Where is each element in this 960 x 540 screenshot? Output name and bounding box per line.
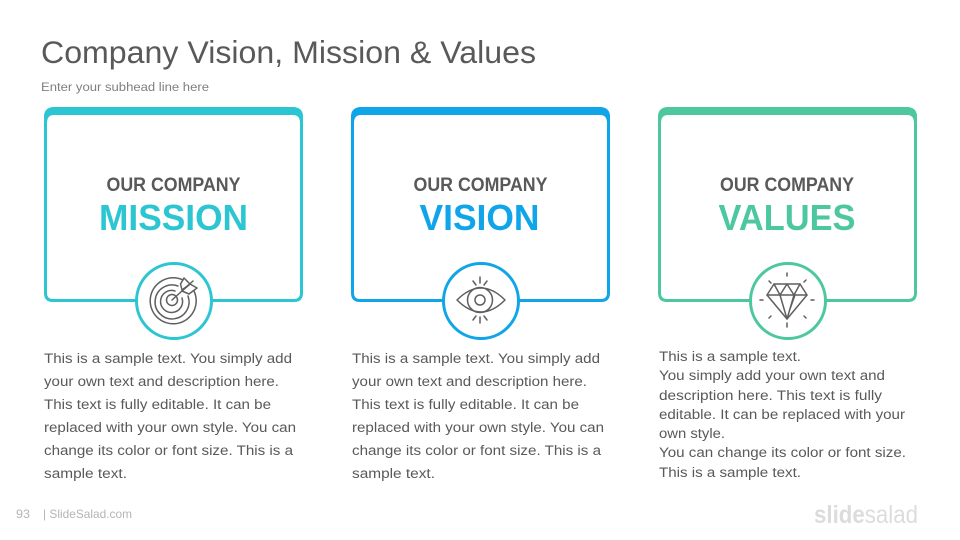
vision description: replaced with your own style. You can bbox=[352, 420, 604, 436]
values description: editable. It can be replaced with your bbox=[659, 407, 905, 423]
footer page number and site: | SlideSalad.com bbox=[43, 507, 132, 521]
values description: This is a sample text. bbox=[659, 349, 801, 365]
vision description: sample text. bbox=[352, 466, 435, 482]
vision description: This is a sample text. You simply add bbox=[352, 351, 600, 367]
icon: target with arrow bbox=[136, 264, 212, 338]
subhead: Enter your subhead line here bbox=[41, 80, 209, 94]
mission description: sample text. bbox=[44, 466, 127, 482]
mission description: replaced with your own style. You can bbox=[44, 420, 296, 436]
brand logo: slidesalad bbox=[814, 501, 918, 529]
values description: You simply add your own text and bbox=[659, 368, 885, 384]
values card frame bbox=[658, 107, 917, 300]
values heading bbox=[718, 174, 856, 238]
vision heading: VISION bbox=[420, 197, 540, 238]
mission heading bbox=[99, 174, 248, 238]
panel: vision bbox=[351, 107, 610, 482]
mission card frame bbox=[44, 107, 303, 300]
mission description: This text is fully editable. It can be bbox=[44, 397, 271, 413]
vision description: change its color or font size. This is a bbox=[352, 443, 601, 459]
panel: values bbox=[658, 107, 917, 481]
vision description: your own text and description here. bbox=[352, 374, 587, 390]
vision description bbox=[352, 351, 604, 482]
panel: mission bbox=[44, 107, 303, 482]
footer page number and site: 93 bbox=[16, 507, 30, 521]
values description bbox=[659, 349, 906, 481]
vision description: This text is fully editable. It can be bbox=[352, 397, 579, 413]
values description: description here. This text is fully bbox=[659, 388, 883, 404]
mission description: This is a sample text. You simply add bbox=[44, 351, 292, 367]
mission description: your own text and description here. bbox=[44, 374, 279, 390]
mission description: change its color or font size. This is a bbox=[44, 443, 293, 459]
title: Company Vision, Mission & Values bbox=[41, 34, 536, 70]
values heading: OUR COMPANY bbox=[720, 174, 854, 196]
values description: This is a sample text. bbox=[659, 465, 801, 481]
vision heading: OUR COMPANY bbox=[414, 174, 548, 196]
vision card frame bbox=[351, 107, 610, 300]
icon: diamond bbox=[750, 264, 826, 338]
vision heading bbox=[414, 174, 548, 238]
values heading: VALUES bbox=[718, 197, 856, 238]
mission heading: OUR COMPANY bbox=[106, 174, 240, 196]
mission description bbox=[44, 351, 296, 482]
values description: own style. bbox=[659, 426, 725, 442]
mission heading: MISSION bbox=[99, 197, 248, 238]
values description: You can change its color or font size. bbox=[659, 445, 906, 461]
icon: eye bbox=[444, 264, 518, 338]
